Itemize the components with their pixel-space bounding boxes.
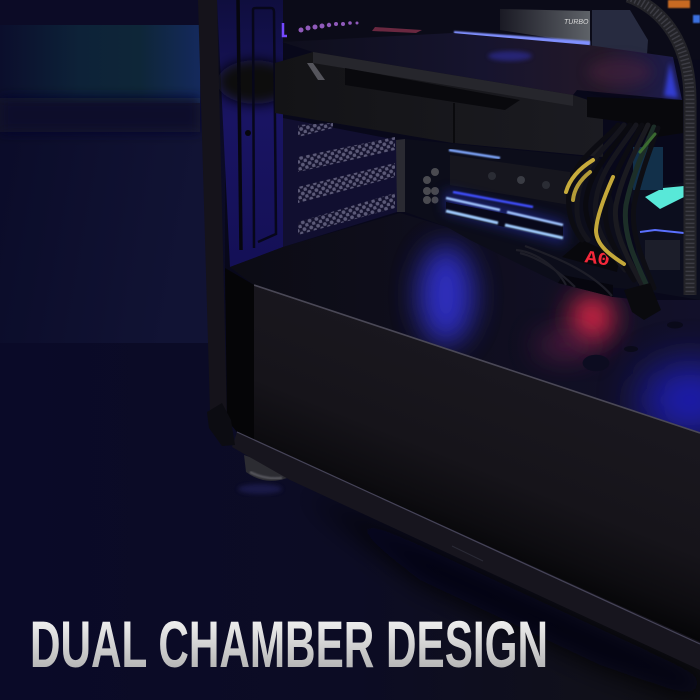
- panel slit 1: [238, 0, 241, 250]
- RAM dark sticks: [446, 202, 563, 240]
- mount hole 1: [624, 346, 638, 352]
- GPU backplate: [282, 27, 682, 100]
- capacitors: [423, 168, 439, 204]
- motherboard label plate: [500, 9, 590, 44]
- blue accent light: [693, 15, 700, 23]
- sleeved cable: [628, 0, 690, 295]
- debug LED display: [562, 240, 620, 272]
- blue light reflection: [418, 245, 474, 345]
- board strip light: [640, 230, 684, 233]
- rear blue panel: [217, 0, 293, 267]
- motherboard heatsink: [592, 10, 648, 55]
- right blue reflection: [640, 365, 700, 435]
- frame screw: [207, 403, 235, 446]
- panel cut-out outline: [253, 8, 276, 248]
- right side board with cyan light: [630, 180, 700, 300]
- keyhole cutout: [583, 355, 609, 371]
- slot 4: [298, 193, 395, 235]
- RAM light 4: [446, 211, 563, 238]
- motherboard label text: TURBO: [564, 19, 589, 26]
- shroud window: [345, 68, 520, 110]
- board chips: [645, 240, 680, 270]
- cyan light: [645, 186, 684, 209]
- PSU connector block: [624, 283, 661, 320]
- GPU power connector: [587, 97, 683, 138]
- chamber cable pass-through: [558, 275, 613, 297]
- GPU shroud: [275, 52, 603, 157]
- thin cables to pass-through: [516, 246, 612, 296]
- case foot: [238, 455, 287, 494]
- panel screw: [245, 130, 251, 136]
- rail highlight: [237, 432, 700, 644]
- black side recess: [225, 268, 254, 440]
- RAM light 3: [446, 198, 563, 225]
- chamber top surface: [230, 213, 700, 435]
- magenta red falloff: [535, 331, 595, 359]
- shroud top band: [313, 52, 573, 106]
- motherboard area upper: [283, 0, 700, 60]
- case rear frame post: [198, 0, 227, 420]
- top ventilation holes lit purple: [298, 21, 358, 32]
- case interior background: [225, 0, 700, 300]
- teal blue block behind cables: [633, 147, 663, 190]
- shroud wedge: [307, 63, 325, 80]
- rail slot: [452, 546, 483, 561]
- dark shadow beneath rail: [300, 490, 700, 700]
- red light reflection: [572, 296, 612, 340]
- blue slot light: [454, 31, 590, 46]
- background wall: [0, 0, 210, 343]
- RAM light 1: [449, 150, 500, 158]
- mount hole 2: [667, 322, 683, 328]
- PSU cable bundle: [566, 125, 658, 288]
- slot 1: [298, 123, 333, 137]
- bottom rail: [232, 432, 700, 670]
- slot 3: [298, 163, 395, 203]
- motherboard lower with RAM: [405, 139, 640, 290]
- PCI slot covers: [283, 118, 405, 247]
- front top edge highlight: [254, 285, 700, 433]
- slot divider edge: [396, 139, 405, 212]
- purple vent glow: [283, 23, 287, 36]
- chamber front face: [237, 285, 700, 642]
- slot 2: [298, 137, 395, 172]
- orange accent light: [668, 0, 690, 8]
- debug LED display: A0: [583, 248, 611, 272]
- RAM light 2: [453, 192, 533, 207]
- RAM glow: [445, 190, 565, 245]
